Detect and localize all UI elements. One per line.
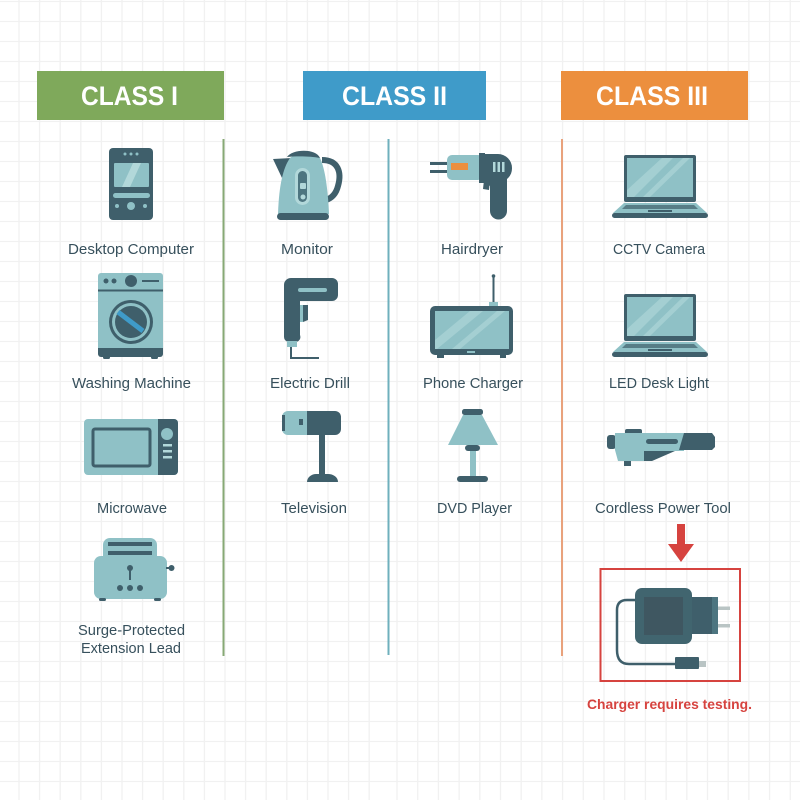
label: Hairdryer: Hairdryer (441, 241, 503, 258)
label: Surge-Protected Extension Lead: Surge-Protected (78, 622, 185, 639)
label: Phone Charger: Phone Charger (423, 375, 523, 392)
heading: Class III (561, 71, 748, 120)
heading: Class I (37, 71, 224, 120)
label: DVD Player: DVD Player (437, 500, 512, 517)
label: Washing Machine: Washing Machine (72, 375, 191, 392)
icon: microwave (84, 419, 178, 475)
label: Microwave: Microwave (97, 500, 167, 517)
heading: Class II: CLASS II (342, 81, 447, 111)
label: Surge-Protected Extension Lead: Extension Lead (81, 640, 181, 657)
arrow: down to charger (668, 524, 694, 562)
icon: toaster (94, 538, 174, 601)
icon: desktop computer (109, 148, 153, 220)
icon: cordless power tool (607, 429, 715, 466)
icon: table lamp (448, 409, 498, 482)
icon: laptop two (612, 294, 708, 357)
label: Cordless Power Tool: Cordless Power Tool (595, 500, 731, 517)
label: Charger requires testing: Charger requires testing. (587, 696, 752, 712)
label: Surge-Protected Extension Lead (78, 622, 185, 657)
label: Desktop Computer: Desktop Computer (68, 241, 194, 258)
icon: hand-held gun tool with cord (284, 278, 338, 358)
callout box: charger (600, 569, 740, 681)
icon: kettle (273, 151, 339, 220)
icon: phone charger (617, 588, 730, 669)
icon: screen with antenna (430, 274, 513, 358)
label: CCTV Camera: CCTV Camera (613, 241, 706, 258)
label: Electric Drill: Electric Drill (270, 375, 350, 392)
icon: drill with plug prongs (430, 153, 512, 220)
heading: Class II (303, 71, 486, 120)
label: Television: Television (281, 500, 347, 517)
heading: Class III: CLASS III (596, 81, 708, 111)
icon: barrel on stand (282, 411, 341, 482)
heading: Class I: CLASS I (81, 81, 178, 111)
label: LED Desk Light: LED Desk Light (609, 375, 710, 392)
label: Monitor: Monitor (281, 241, 333, 258)
icon: washing machine (98, 273, 163, 359)
icon: laptop one (612, 155, 708, 218)
